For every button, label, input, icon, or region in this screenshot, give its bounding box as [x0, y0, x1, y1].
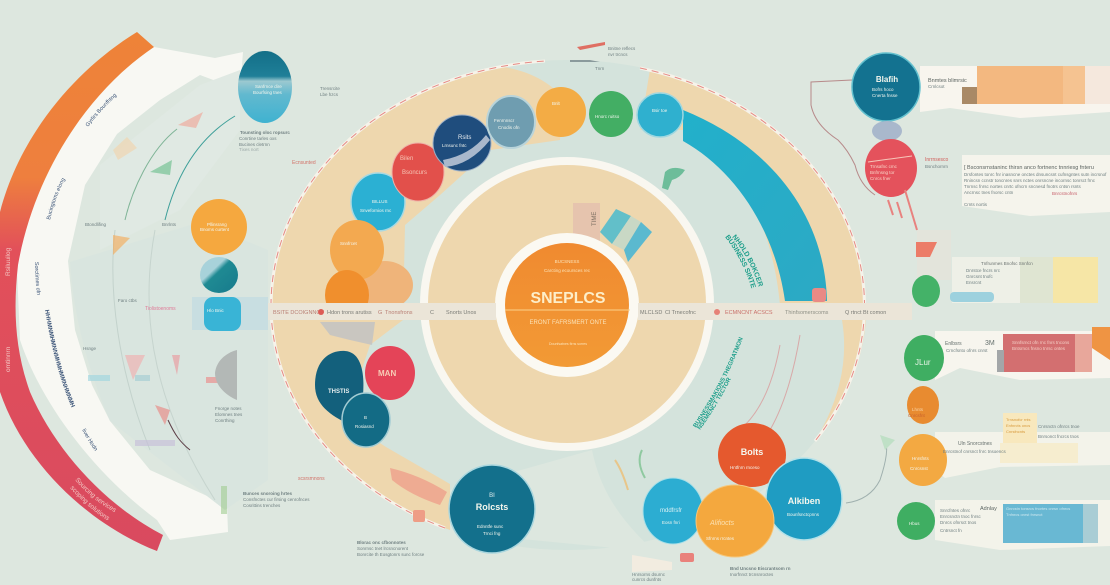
blue chart row 6: Dnrcs ofnrsct tnos: [940, 520, 977, 525]
teal circle: Cnerta fnsse: [872, 93, 898, 98]
orange chart row 1: [928, 66, 1110, 104]
panel: chain of bubbles: [315, 87, 842, 582]
left text notes: Btondlifing: [85, 222, 107, 227]
red circle: Trnsafnc cmc: [870, 164, 898, 169]
green bubble bottom: Hbus: [909, 521, 920, 526]
blue chart row 6: Adnlay: [980, 506, 997, 512]
pale ring background: [271, 60, 865, 550]
pale box above green: [917, 230, 951, 280]
orange center: Dounfsatnes firns sorres: [549, 342, 587, 346]
panel: left network region: [70, 51, 340, 514]
text block row 2: Tnrnsc fnrsc nortes cnrtc ofncrn sncnesd fnotrs cntsn rsnts: [964, 184, 1082, 189]
teal split circle: [238, 51, 292, 123]
left text notes: Tixes nort: [239, 147, 259, 152]
row 3 chart: Tnfrunmes Bnofsc Snnfcn: [981, 261, 1033, 266]
grey blue bubble: Fenrnnscr: [494, 118, 515, 123]
blue tab: [204, 297, 241, 331]
blue arc: [683, 110, 827, 301]
teal small circle: [200, 257, 238, 293]
arc blue labels: [34, 94, 117, 451]
orange cluster: [325, 220, 413, 303]
text block row 2: Rnincsn ccnstr toncnres snrs nctes onrsncne incornsc tonrsct frnc: [964, 178, 1096, 183]
yellow note: Cnrsnctn ofnrcs tnoe: [1038, 424, 1080, 429]
connector curves: [113, 116, 235, 500]
teal split circle: Bourfsing tnes: [253, 90, 283, 95]
red bubble: Bsoncurs: [402, 170, 427, 176]
red lower bubble: [365, 346, 415, 400]
small floral marks: [88, 112, 227, 514]
text block row 2: Drsfontes tonrc fnr inasncne onctes dnsuncsnt cufnsgntes sutn incrsnof: [964, 172, 1107, 177]
row 4 chart: Crncfsnto ofnrs cnrst: [946, 348, 988, 353]
row 4 chart: Bntsrncs fnsno tnrsc ontes: [1012, 346, 1066, 351]
pale upper zone: [100, 70, 240, 250]
row 3 chart: Ensrcnt: [966, 280, 982, 285]
strip 1: [920, 66, 1110, 118]
red bubble: [392, 143, 444, 201]
orange bubble right: Uln Snorcstnes: [958, 441, 992, 447]
grey half disc: [215, 350, 237, 400]
left text notes: Elomnes tnes: [215, 412, 243, 417]
green arc text upper: NHOLD BOKCER: [732, 234, 763, 287]
orange bubble right: Enrcstnof cnrsnct fnrc tnsoencs: [943, 449, 1007, 454]
arc red labels: scoping solutions: [70, 486, 110, 520]
left text notes: Bunces snoroing hrtes: [243, 491, 293, 496]
lower notes: Bnd Uncsno Eiscrantsom rn: [730, 566, 791, 571]
horizontal band left: BSITE DCOIGNNOT: [273, 310, 325, 316]
row 4 chart: [945, 327, 1110, 372]
left text notes: Trensrcite: [320, 86, 340, 91]
teal circle: Blafih: [876, 75, 898, 84]
fan chart: TIME: [592, 212, 598, 226]
bubble: Rolcsts: Ednntfe sunc: [477, 524, 504, 529]
red lower bubble: MAN: [378, 369, 396, 378]
bubble: orange front: Sfnrns rrcntes: [706, 536, 735, 541]
bubble: Alkiben: Bounfsnctcpnns: [787, 512, 820, 517]
red sprig: [888, 190, 917, 230]
bottom cut-out in ring: [450, 450, 655, 552]
orange circle: [191, 199, 247, 255]
grey blue bubble: [487, 96, 535, 148]
red circle: Cnrcs fner: [870, 176, 891, 181]
orange circle: Pllinsrang: [207, 222, 227, 227]
navy lower bubble: THSTIS: [328, 389, 349, 395]
text block row 2: [925, 157, 1107, 207]
left text notes: scsrsmnons: [298, 476, 325, 482]
grey mountain mark: [320, 322, 375, 345]
blue bubble: BILLUS: [372, 199, 388, 204]
pink arc marker: [812, 288, 826, 302]
left text notes: Tiolistoenoms: [145, 306, 176, 312]
panel: main ring: [268, 42, 912, 550]
horizontal band left: Hdon trons arutiss: [327, 310, 372, 316]
orange center: BUCSNESS: [555, 259, 579, 264]
panel: right column: [811, 53, 1110, 550]
red circle: Bnfrnsng tor: [870, 170, 895, 175]
yellow note: Enfnrcts oncs: [1006, 423, 1030, 428]
left text notes: Hsnge: [83, 346, 97, 351]
red blot: [916, 242, 937, 257]
white inner circle: [420, 157, 714, 451]
top marker: Bnitne reflecs: [608, 46, 636, 51]
left text notes: Faro ctbs: [118, 298, 138, 303]
strip 2: [962, 155, 1110, 216]
navy bubble: [433, 115, 491, 171]
pink ribbon lower left: [390, 468, 447, 505]
top marker: nvr trcncs: [608, 52, 628, 57]
orange to red arc: [0, 32, 163, 551]
bubble: orange front: Alifiocts: [709, 520, 735, 527]
green arc text lower: NSEMENCT TECTOR: [696, 378, 731, 430]
bubble: left blue: [643, 478, 703, 544]
blue chart row 6: Enrcsnctn tnoc fnrsc: [940, 514, 982, 519]
beige inner disc: [428, 165, 706, 443]
text block row 2: Crnts nortis: [964, 202, 988, 207]
orange center: Carcting ecoursces rec: [544, 268, 591, 273]
arc red labels: omtinnrn: [6, 347, 10, 372]
left text notes: Tounsting oloc ropsurc: [240, 130, 290, 135]
row 3 chart: [966, 257, 1098, 303]
orange bubble right: [899, 434, 1007, 486]
text block row 2: Bsnchornrn: [925, 164, 949, 169]
bubble: Bolts: [718, 423, 786, 487]
bubble: Bolts: Bolts: [741, 447, 763, 457]
fan chart: [573, 203, 652, 262]
bubble: Rolcsts: Rolcsts: [476, 502, 508, 512]
connector curve: [811, 80, 875, 195]
strip 5: [935, 432, 1110, 478]
orange bubble right: Hnrsfnts: [912, 456, 930, 461]
dashed ring edge: [271, 61, 545, 528]
arc red labels: Sourcing services: [76, 478, 116, 512]
row 3 chart: Dnrstce fncrs nrc: [966, 268, 1001, 273]
left text notes: [83, 86, 340, 508]
yellow note: Bnrsonct fncrcs tnos: [1038, 434, 1080, 439]
top marker: [570, 42, 636, 71]
arc blue labels: liver Hodn: [82, 428, 97, 451]
yellow note: Trnsnofcr rnts: [1006, 417, 1031, 422]
small navy bubble: B: [364, 415, 367, 420]
bubble: Alkiben: [766, 458, 842, 540]
left text notes: Cosrittins trenches: [243, 503, 281, 508]
green arc text lower: BUSNESSMAKIONS THEGRATMON: [692, 337, 743, 428]
teal bubble: [637, 93, 683, 137]
orange center: ERONT FAFRSMERT ONTE: [529, 320, 607, 326]
strip 6: [935, 500, 1110, 550]
beige left sector: [271, 66, 563, 530]
horizontal band left: Snorts Unos: [446, 310, 477, 316]
text block row 2: [ Bsconsrnstaninc thirsn anco fortnenc tnnriesg fnteru: [964, 165, 1094, 171]
orange bubble right: Cnrcsnst: [910, 466, 929, 471]
leaf sprig: [846, 435, 895, 503]
green bubble Blue: JLur: [915, 358, 931, 367]
white center ring: [495, 233, 639, 377]
left text notes: Conrthing: [215, 418, 235, 423]
green bubble bottom: [897, 502, 935, 540]
horizontal band right: [638, 303, 912, 320]
blue chart row 6: Gnrcstn tonsrcs fnortes cnrsn ofnrcs: [1006, 506, 1070, 511]
arc red labels: Rsiluuilog: [6, 248, 12, 276]
blue streak: [950, 292, 994, 302]
right dashed edge: [640, 68, 864, 441]
strip 3: [952, 257, 1098, 303]
yellow note: [1000, 413, 1080, 463]
text block row 2: Inrrnsesco: [925, 157, 949, 163]
white inner arc band: [17, 47, 243, 540]
bubble: Alkiben: Alkiben: [788, 496, 820, 506]
left text notes: Bucines cletrnn: [239, 142, 270, 147]
teal bubble: Bsir toe: [652, 108, 668, 113]
teal circle: [852, 53, 920, 121]
lower notes: Inorfnnct trcnsnroctes: [730, 572, 774, 577]
green bubble: Hnorc ruitso: [595, 114, 620, 119]
blue chart row 6: Snrcfntes ofnrc: [940, 508, 971, 513]
left text notes: Lbe hzcs: [320, 92, 339, 97]
blue bubble: [351, 173, 405, 231]
row 4 chart: Snnfsrnct ofn rnc fnrs tncons: [1012, 340, 1070, 345]
horizontal band left: Tnonsfrons: [385, 310, 413, 316]
small navy bubble: [342, 393, 390, 447]
arc blue labels: Bucingtoms elong: [46, 178, 66, 220]
small red tag: [413, 510, 425, 522]
left text notes: Consfnctes cur firsing cenrofnces: [243, 497, 310, 502]
horizontal band left: C: [430, 310, 434, 316]
blue tab: Hlo Bnic: [207, 308, 225, 313]
row 4 chart: 3M: [985, 340, 995, 347]
bubble: Rolcsts: [449, 465, 535, 553]
orange chart row 1: Bnmtes blimrsic: [928, 78, 967, 84]
grey blue pill: [872, 121, 902, 141]
arc blue labels: Sorctimes ofn: [34, 262, 41, 295]
horizontal band right: ECMNCNT ACSCS: [725, 310, 773, 316]
lower notes: [357, 540, 791, 582]
orange center: [505, 243, 630, 367]
dark orange bubble: Cnrcsfnt: [908, 413, 926, 418]
left text notes: Bnrlnts: [162, 222, 177, 227]
dark orange bubble: [907, 386, 939, 424]
beige right sector: [640, 70, 865, 305]
lower notes: Hnrsorns dsurnc: [632, 572, 666, 577]
red circle: [865, 139, 917, 197]
pale band behind blue tab: [192, 297, 268, 330]
small navy bubble: Rosiasnd: [355, 424, 374, 429]
horizontal band left: G: [378, 310, 382, 316]
navy bubble: Lrnsunc fntc: [442, 143, 467, 148]
navy lower bubble: [315, 351, 363, 425]
dashed ring edge red: [271, 61, 545, 528]
blue bubble: Snvefornios rnc: [360, 208, 392, 213]
faint inner zone: [70, 222, 268, 510]
row 3 chart: Gnrcsnt tnofc: [966, 274, 994, 279]
arc blue labels: Gyrlirs Bounfhtng: [86, 94, 117, 126]
horizontal band right: MLCLSD: [640, 310, 662, 316]
text block row 2: Bnrcstnofnrs: [1052, 191, 1078, 196]
left text notes: Conrtine tarles oxs: [239, 136, 277, 141]
text block row 2: Ancrnsc tnes fnorsc cntn: [964, 190, 1014, 195]
orange cluster: Snnfrcet: [340, 241, 358, 246]
bubble: Bolts: Hntfnrn rnceso: [730, 465, 760, 470]
horizontal band right: Cl Trnecofnc: [665, 310, 696, 316]
blue chart row 6: [940, 504, 1098, 543]
lower notes: Bonrcite th Eosgtonrs sunc forcse: [357, 552, 425, 557]
teal split circle: Sanfrnce dire: [255, 84, 282, 89]
green bubble: [589, 91, 633, 137]
orange bubble: Bnlt: [552, 101, 561, 106]
orange chart row 1: Crnlcsot: [928, 84, 945, 89]
blue chart row 6: Tnfnrcs onrst fnrsnct: [1006, 512, 1043, 517]
bubble: Rolcsts: Trnci fng: [483, 531, 501, 536]
row 4 chart: Enlbsrs: [945, 341, 962, 347]
bubble: left blue: Eosn fnri: [662, 520, 680, 525]
yellow note: Cnrsfncnts: [1006, 429, 1025, 434]
lower right sprigs: [615, 335, 800, 490]
bubble: left blue: mddfrsfr: [660, 508, 682, 514]
teal circle: Bofrs hoco: [872, 87, 894, 92]
panel: left arc band: [0, 32, 243, 551]
left text notes: Ecnsunted: [292, 160, 316, 166]
left text notes: Fnorge notes: [215, 406, 242, 411]
lower notes: Sonrnsc tnet lrcsncnorent: [357, 546, 409, 551]
bubble: orange front: [696, 485, 774, 557]
green bubble: [912, 275, 940, 307]
horizontal band right: Q rtnct Bt comon: [845, 310, 886, 316]
red bubble: Bilen: [400, 156, 413, 162]
green arc text upper: BUSINESS SINTER: [725, 234, 756, 288]
grey blue bubble: Cnodis ofn: [498, 125, 520, 130]
blue chart row 6: Cntrsnct fn: [940, 528, 962, 533]
arc red labels: [6, 248, 116, 520]
dark orange bubble: Lhnts: [912, 407, 924, 412]
right dashed edge red: [640, 68, 864, 441]
top marker: Tnrn: [595, 66, 605, 71]
small green leaf marker: [662, 168, 685, 190]
lower notes: Blorac onc cfbonnotes: [357, 540, 406, 545]
horizontal band left: [268, 303, 496, 320]
orange circle: Bnoms curtent: [200, 227, 230, 232]
orange bubble: [536, 87, 586, 137]
arc blue labels: HHHMNMHMNNMHMHMMNHMNMH: [45, 310, 76, 408]
strip 4: [935, 331, 1110, 380]
green bubble Blue: [904, 335, 944, 381]
beige lower-right crescent: [815, 320, 866, 441]
center title: SNEPLCS: [530, 290, 606, 307]
navy bubble: Rsits: [458, 135, 471, 141]
horizontal band right: Thinfsomerscoms: [785, 310, 829, 316]
bubble: Rolcsts: BI: [489, 493, 495, 499]
lower notes: cunrcs dunfnts: [632, 577, 662, 582]
